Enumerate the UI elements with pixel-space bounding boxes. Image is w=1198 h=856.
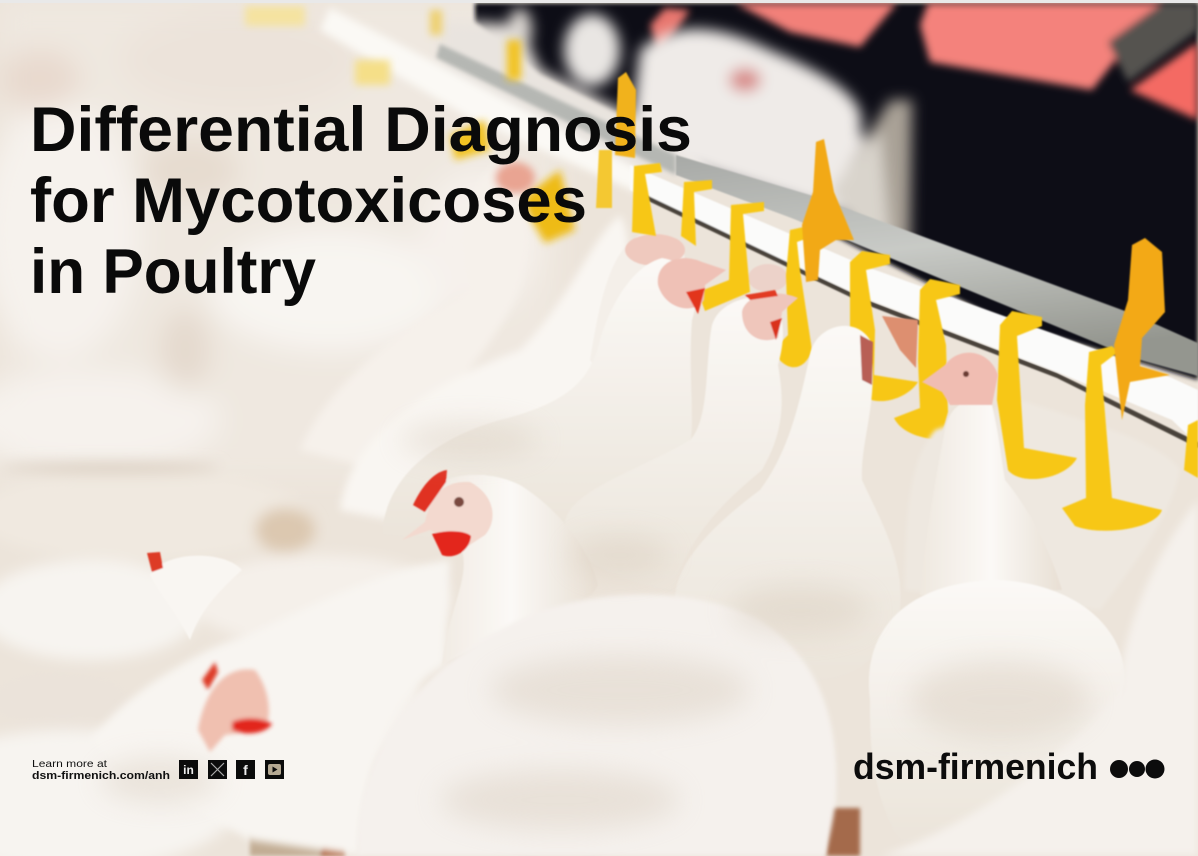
- body D: [382, 258, 695, 539]
- yellow drinker clips and cups near: [997, 238, 1198, 531]
- body C: [869, 580, 1125, 842]
- chicken B: [675, 326, 901, 682]
- chicken D: [382, 258, 726, 539]
- learn more label: Learn more at: [32, 758, 107, 770]
- clip 1: [596, 150, 612, 208]
- dark shed background: [475, 3, 1198, 380]
- pink curtain flaps: [650, 3, 1198, 120]
- website url: dsm-firmenich.com/anh: [32, 770, 170, 782]
- clip 5 with cup: [773, 226, 812, 367]
- rear chicken right: [905, 400, 1180, 610]
- clip 2: [632, 163, 662, 236]
- front chicken: [357, 470, 836, 856]
- eye: [454, 497, 464, 507]
- title line 2: for Mycotoxicoses: [30, 166, 587, 236]
- small chicken head left: [147, 552, 242, 640]
- clip 8 with cup: [997, 311, 1077, 479]
- icon: youtube: [265, 760, 284, 779]
- comb: [413, 470, 447, 512]
- icon: x: [208, 760, 227, 779]
- blurred flock: lower left: [0, 462, 450, 856]
- edge clip: [1184, 420, 1198, 478]
- chicken C: [869, 353, 1125, 842]
- water pipe far section: [436, 44, 676, 175]
- lower left chicken: [90, 560, 450, 856]
- chicken head rear: [625, 234, 685, 266]
- clip 6 with cup: [850, 251, 918, 401]
- clip 7 with cup: [894, 279, 960, 440]
- title line 1: Differential Diagnosis: [30, 95, 692, 165]
- tall post 2: [802, 139, 854, 282]
- head C: [922, 353, 998, 405]
- body A: [565, 297, 783, 592]
- right foreground chicken: [880, 500, 1198, 856]
- white rail far section: [320, 8, 638, 193]
- white drinker rail: [630, 165, 1198, 448]
- clip 4: [698, 202, 764, 311]
- lower left chicken head: [198, 662, 272, 752]
- blurred chicken neck behind title: [300, 160, 628, 520]
- comb: [147, 552, 163, 572]
- tall post 3: [1114, 238, 1170, 420]
- soft feather shading: [100, 422, 1090, 830]
- title: [30, 95, 692, 307]
- learn more text: [32, 758, 170, 782]
- clip 9 with cup: [1062, 346, 1162, 531]
- comb B: [860, 335, 873, 385]
- logo dots: [1110, 760, 1164, 778]
- icon: linkedin: [179, 760, 198, 779]
- head: [198, 669, 269, 752]
- clip 3: [681, 180, 712, 246]
- top page strip: [0, 0, 1198, 3]
- body: [90, 560, 450, 856]
- far chicken behind rail: [748, 264, 788, 292]
- icon: linkedin: in: [183, 763, 194, 777]
- blurred bird behind rail: [440, 8, 912, 250]
- chicken behind left: [590, 234, 690, 420]
- brand logo: [853, 746, 1164, 787]
- big body: [357, 595, 836, 856]
- chicken neck rear: [590, 234, 690, 420]
- body B: [675, 326, 901, 682]
- head A: [742, 293, 798, 340]
- far yellow drinkers (blurred): [245, 6, 575, 243]
- head D: [658, 258, 726, 308]
- blurred flock: far left: [0, 0, 560, 480]
- icon: facebook: f: [243, 762, 248, 778]
- icon: facebook: [236, 760, 255, 779]
- chicken A: [565, 290, 798, 592]
- chicken E hanging head: [882, 316, 918, 368]
- water pipe near section: [676, 155, 1198, 376]
- bottom wire floor: [250, 800, 860, 856]
- neck: [150, 556, 242, 640]
- head: [402, 482, 493, 548]
- title line 3: in Poultry: [30, 237, 316, 307]
- wattle: [432, 531, 471, 556]
- logo wordmark: dsm-firmenich: [853, 746, 1098, 787]
- tall post 1: [615, 72, 636, 158]
- yellow drinker clips and cups far: [596, 72, 960, 440]
- neck: [424, 475, 598, 665]
- neck C: [920, 400, 1062, 595]
